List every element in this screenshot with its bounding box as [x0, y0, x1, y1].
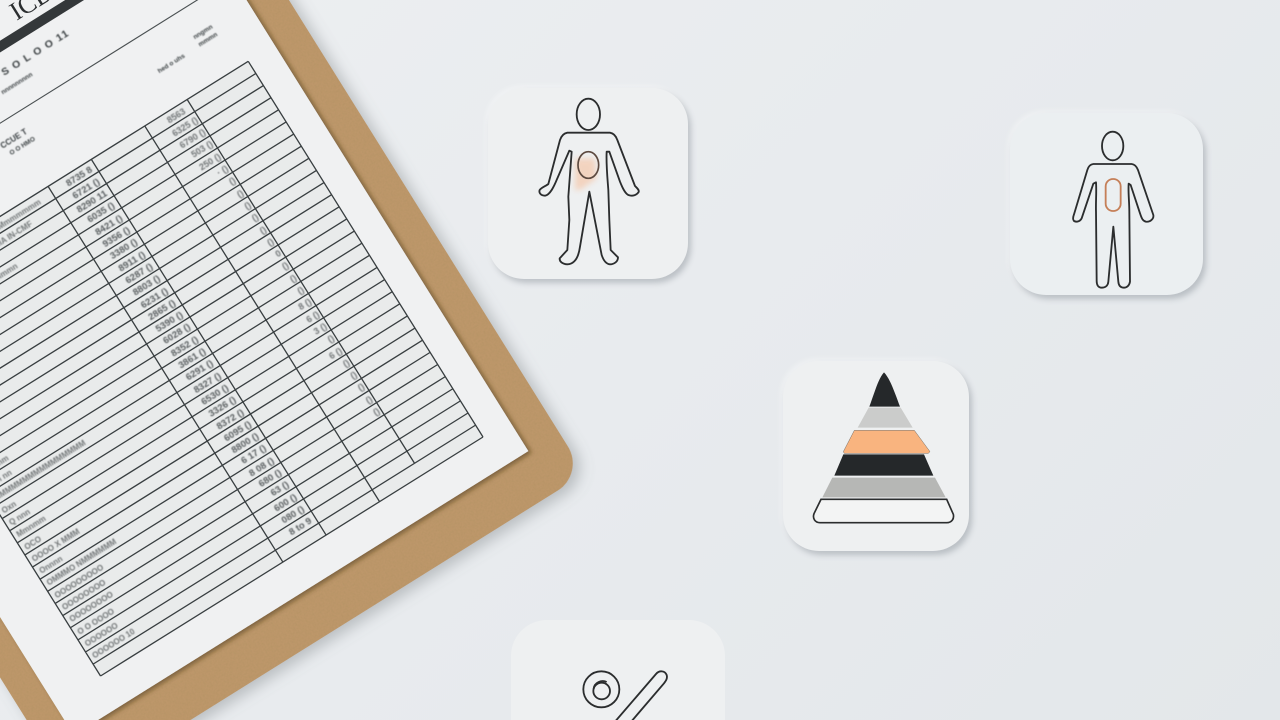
- table description column: OOOO X MMM: [30, 527, 82, 564]
- table values column: 6790 (): [178, 127, 207, 150]
- table codes column: 2865 (): [146, 298, 178, 323]
- table codes column: 8327 (): [192, 371, 223, 396]
- table codes column: 8 to 9: [287, 516, 314, 538]
- table description column: Q nnn: [7, 507, 32, 527]
- table values column: (): [364, 394, 374, 406]
- table codes column: 6231 (): [139, 286, 170, 311]
- table values column: (): [326, 333, 336, 345]
- table description column: Oxn: [0, 499, 18, 515]
- header bar: [0, 0, 175, 211]
- table description column: Mmnmm: [15, 514, 48, 539]
- table codes column: 8372 (): [215, 407, 246, 432]
- table values column: (): [356, 381, 366, 393]
- table codes column: 6287 (): [124, 261, 155, 287]
- table values column: 8 (): [296, 296, 313, 312]
- pyramid tip layer: [869, 372, 900, 407]
- table codes column: 3861 (): [177, 346, 208, 371]
- table values column: (): [250, 212, 260, 223]
- table codes column: 680 (): [257, 467, 284, 490]
- table description column: OOOOOO: [83, 621, 120, 648]
- table codes column: 5390 (): [154, 310, 185, 335]
- table codes column: [60, 164, 315, 543]
- organ capsule: [1106, 179, 1121, 211]
- table description column: OOOOOOOO: [68, 590, 115, 624]
- dark layer: [834, 454, 933, 476]
- table codes column: 8421 (): [93, 213, 125, 238]
- table codes column: 8 08 (): [247, 455, 276, 479]
- organ oval: [578, 152, 599, 178]
- table codes column: 3326 (): [207, 394, 238, 420]
- body outline: [1073, 132, 1153, 288]
- table codes column: 9356 (): [101, 225, 132, 250]
- header rule: [0, 0, 234, 262]
- table values column: (): [295, 285, 306, 296]
- table values column: 8563: [165, 106, 187, 125]
- table values column: (): [348, 369, 359, 381]
- table values column: (): [235, 188, 245, 200]
- table values column: 3 (): [312, 321, 329, 337]
- table description column: OOOOOOOO: [60, 578, 107, 612]
- table values column: (): [341, 357, 351, 369]
- table values column: 6 (): [327, 346, 344, 361]
- header text: hed o uhs: [157, 53, 187, 75]
- table values column: (): [265, 236, 276, 248]
- table values column: (): [227, 175, 237, 187]
- table description column: Onnnn: [38, 554, 64, 576]
- table description column: OCO: [23, 534, 43, 552]
- table codes column: 8352 (): [169, 334, 201, 359]
- data table: [0, 61, 483, 676]
- table description column: O O OOOO: [76, 607, 116, 637]
- table codes column: 8800 (): [230, 431, 261, 456]
- table codes column: 8911 (): [117, 249, 148, 274]
- orange layer: [843, 430, 930, 453]
- table codes column: 3380 (): [108, 237, 140, 262]
- table codes column: 6721 (): [71, 176, 102, 202]
- light grey layer: [858, 408, 913, 428]
- icon card: body with capsule organ: [1010, 113, 1203, 295]
- header text: O O HMO: [8, 136, 37, 157]
- table values column: 0: [273, 248, 283, 259]
- white base layer: [814, 499, 954, 523]
- icon card: body with oval organ: [488, 88, 688, 279]
- table codes column: 8290 11: [75, 188, 110, 216]
- table codes column: 6028 (): [161, 321, 193, 347]
- table values column: · (): [215, 163, 230, 178]
- table values column: 503 (): [189, 139, 215, 160]
- table codes column: 63 (): [269, 479, 291, 499]
- table values column: 6 (): [304, 309, 321, 325]
- table description column: OOOOOO 10: [91, 627, 137, 660]
- table values column: 6325 (): [170, 115, 200, 139]
- header text: [0, 0, 220, 167]
- table values column: (): [242, 200, 253, 211]
- table values column: 250 (): [197, 151, 223, 172]
- body outline: [539, 99, 639, 264]
- table description column: OMMMO NMMMMMM: [45, 537, 118, 587]
- icon card: percent symbol: [511, 620, 725, 720]
- percent slash: [615, 671, 667, 720]
- percent ring: [583, 671, 619, 707]
- table codes column: 8735 8: [64, 165, 95, 189]
- table values column: (): [280, 260, 290, 272]
- table codes column: 600 (): [272, 492, 299, 514]
- table values column: (): [371, 406, 382, 417]
- table codes column: 6530 (): [199, 382, 231, 408]
- header text: mmmn: [197, 31, 219, 48]
- paper sheet: [0, 0, 528, 720]
- table codes column: 6035 (): [85, 200, 117, 225]
- table codes column: 6 17 (): [239, 443, 268, 467]
- table codes column: 080 (): [280, 504, 307, 526]
- clipboard board: [0, 0, 585, 720]
- table codes column: 8803 (): [131, 273, 162, 298]
- icon card: layered pyramid: [783, 361, 969, 551]
- table values column: (): [288, 273, 298, 284]
- table codes column: 6291 (): [184, 358, 215, 383]
- organ highlight: [575, 158, 597, 190]
- table description column: [0, 198, 262, 660]
- header text: nnnnnnnnn: [0, 71, 34, 96]
- table codes column: 6095 (): [222, 419, 254, 444]
- mid grey layer: [822, 478, 946, 497]
- table description column: OOOOOOOOO: [53, 563, 105, 600]
- table values column: (): [258, 224, 268, 236]
- header text: nngmn: [192, 24, 214, 41]
- form header: [0, 0, 257, 299]
- table values column: [163, 103, 382, 429]
